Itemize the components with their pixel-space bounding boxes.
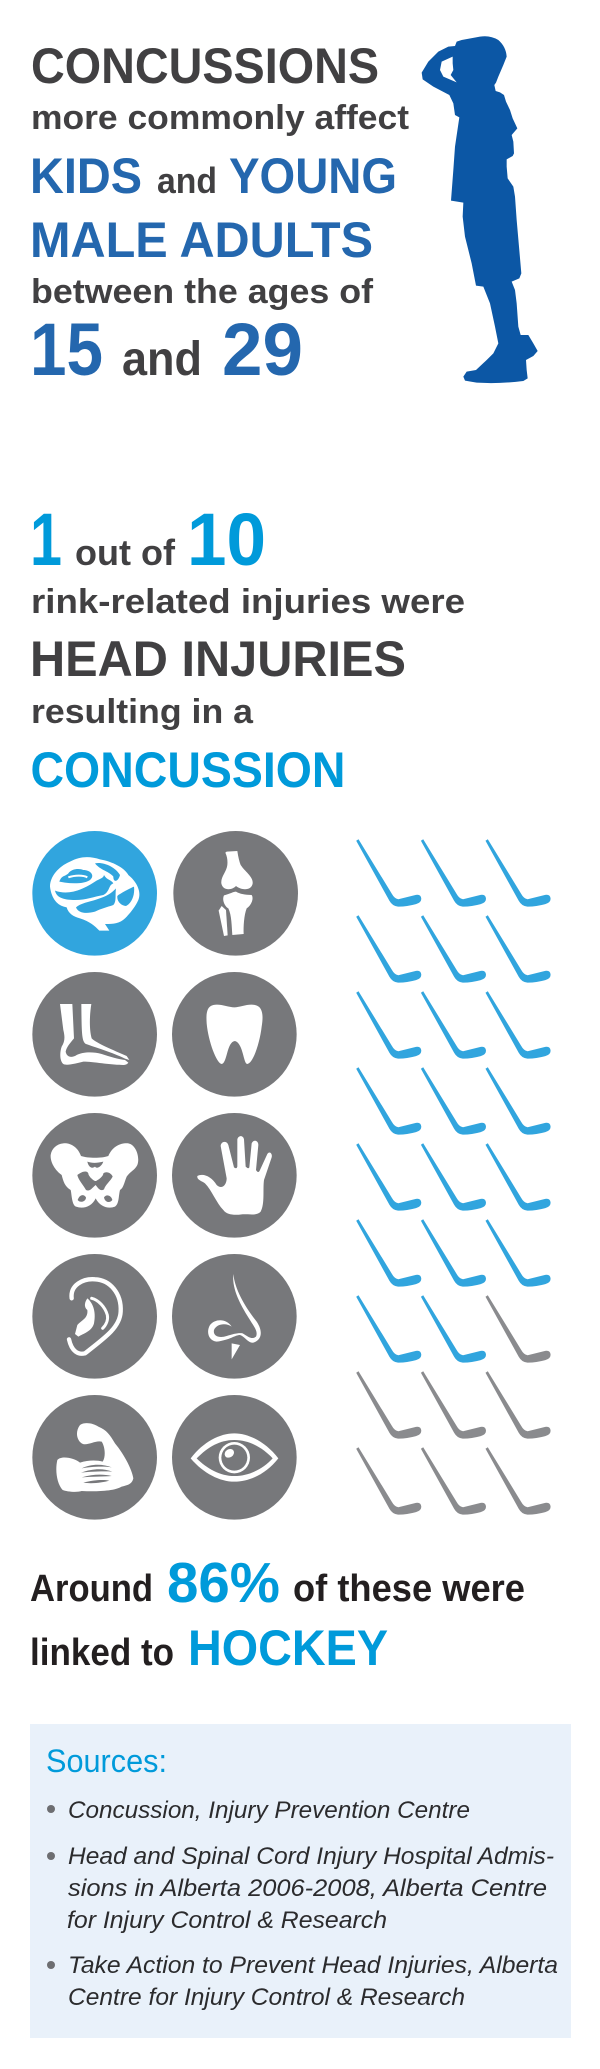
number: 15: 15 — [30, 308, 103, 391]
panel: rink-related injuries — [30, 498, 465, 798]
chart: hockey stick pictogram, 9 rows of 3 — [356, 839, 551, 1515]
source 2: sions in Alberta 2006-2008, Alberta Centre — [68, 1875, 547, 1902]
icon: nose — [172, 1254, 297, 1379]
heading: male adults: MALE ADULTS — [30, 212, 373, 268]
panel: who concussions affect — [30, 38, 409, 391]
heading: kids: KIDS — [30, 148, 142, 204]
text: and: and — [122, 333, 202, 386]
sticks: blue sticks — [356, 839, 551, 1363]
icon: knee joint — [173, 831, 298, 956]
icon: brain — [32, 831, 157, 956]
source 3: Centre for Injury Control & Research — [68, 1984, 465, 2011]
text: linked to: linked to — [30, 1632, 174, 1674]
text: around: Around — [30, 1568, 153, 1610]
icon: tooth — [172, 972, 297, 1097]
text: out of: out of — [75, 532, 176, 573]
icon: hand — [172, 1113, 297, 1238]
source 3: Take Action to Prevent Head Injuries, Alberta — [68, 1952, 558, 1979]
panel: sources — [30, 1724, 571, 2038]
text: between the ages of: between the ages of — [31, 273, 374, 311]
text: rink-related injuries were: rink-related injuries were — [31, 583, 465, 621]
panel: hockey statistic — [30, 1551, 525, 1676]
number: 86%: 86% — [167, 1551, 280, 1615]
icon: ear — [32, 1254, 157, 1379]
text: more commonly affect: more commonly affect — [31, 99, 409, 137]
icon: eye — [172, 1395, 297, 1520]
heading: hockey: HOCKEY — [188, 1620, 388, 1676]
heading: sources: Sources: — [46, 1743, 167, 1779]
icon: boy silhouette saluting — [422, 36, 538, 383]
text: of these were: of these were — [293, 1568, 525, 1610]
number: 10: 10 — [187, 498, 266, 581]
source 3 — [47, 1952, 558, 2011]
icon: pelvis — [32, 1113, 157, 1238]
text: resulting in a: resulting in a — [31, 693, 254, 731]
icon: flexed muscle — [32, 1395, 157, 1520]
heading: concussion: CONCUSSION — [30, 742, 346, 798]
heading: young: YOUNG — [229, 148, 397, 204]
number: 1: 1 — [30, 498, 62, 581]
number: 29: 29 — [222, 308, 303, 391]
source 2 — [47, 1843, 554, 1934]
heading: head injuries: HEAD INJURIES — [30, 631, 406, 687]
source 2: for Injury Control & Research — [67, 1907, 387, 1934]
icon: foot — [32, 972, 157, 1097]
source 2: Head and Spinal Cord Injury Hospital Admis- — [68, 1843, 554, 1870]
text: and: and — [157, 160, 217, 201]
heading: concussions: CONCUSSIONS — [31, 38, 379, 94]
source 1: Concussion, Injury Prevention Centre — [68, 1797, 470, 1824]
sticks: gray sticks — [356, 1295, 551, 1515]
